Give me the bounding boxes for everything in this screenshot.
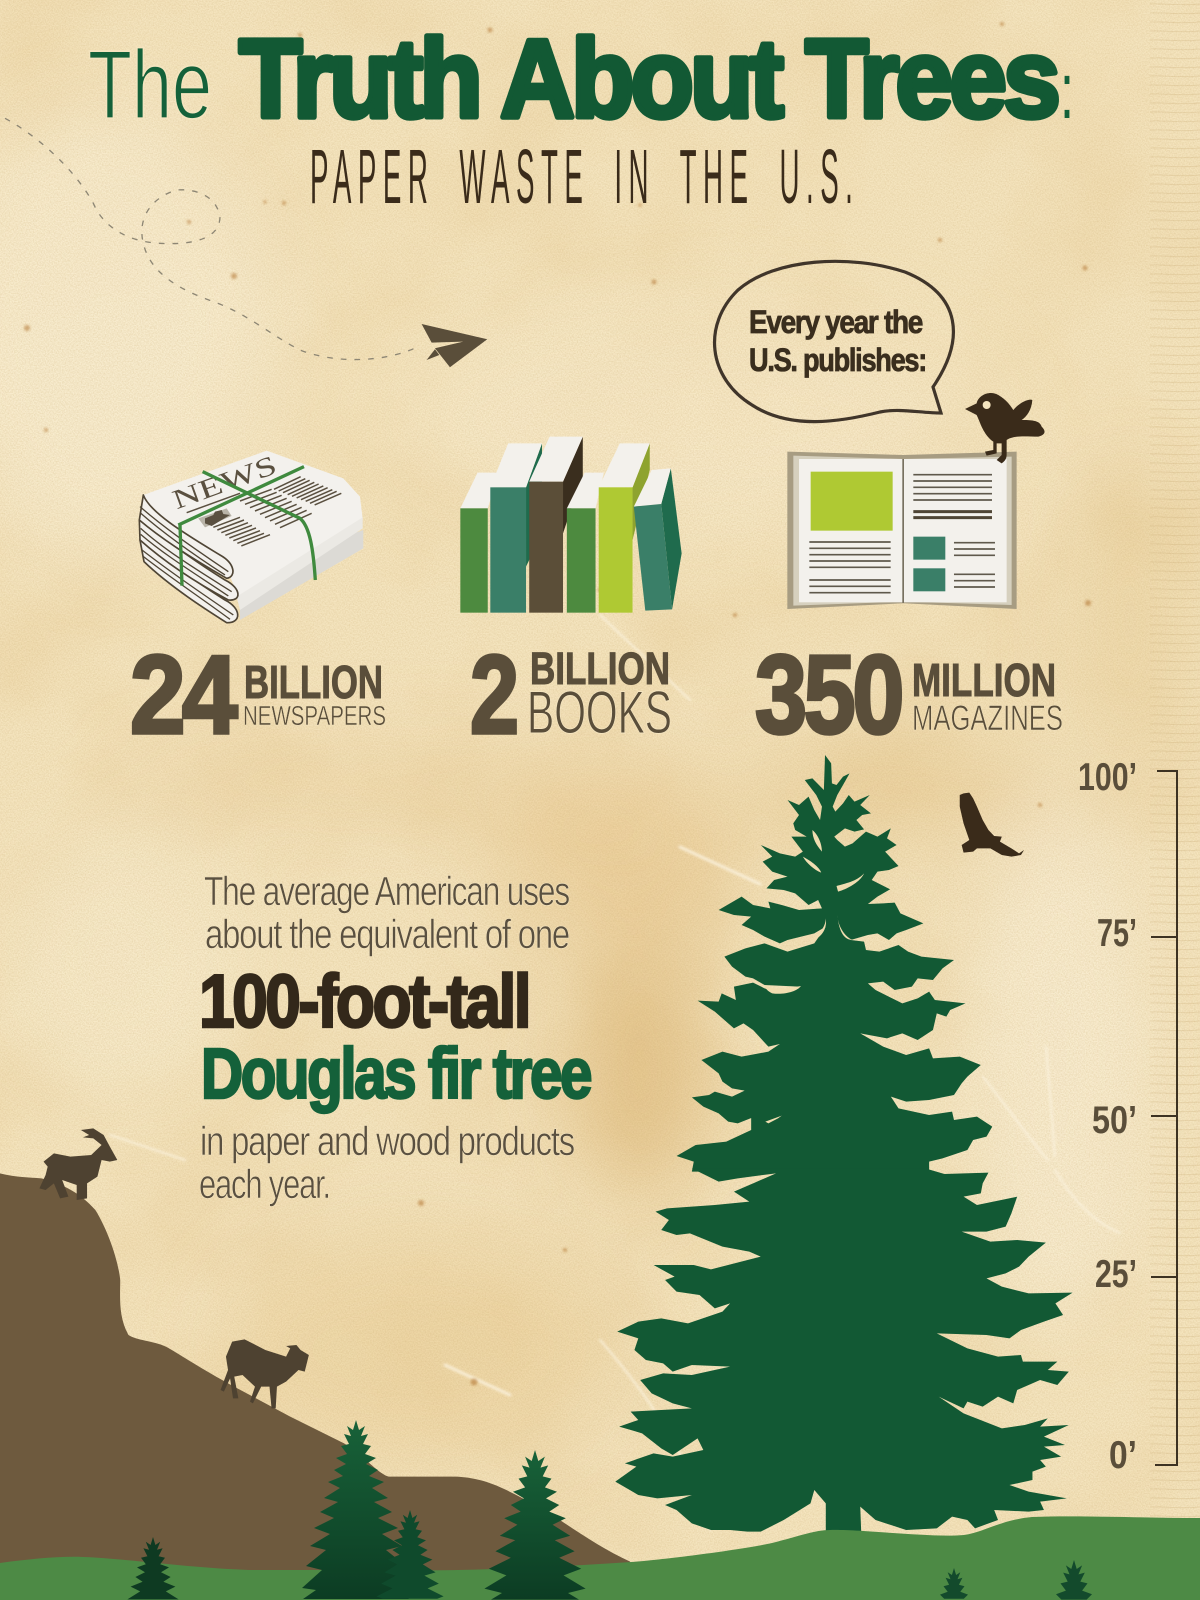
icon: newspapers: [139, 450, 363, 623]
book 3: [529, 437, 583, 613]
goat on cliff: [39, 1128, 117, 1200]
label 100 feet: 100’: [1078, 756, 1137, 799]
title word: The: The: [88, 30, 212, 139]
lime picture: [811, 472, 893, 531]
dashed flight path: [5, 118, 418, 360]
icon: magazine: [787, 452, 1017, 609]
icon: paper plane: [422, 324, 487, 367]
stat: 350 million magazines: [755, 633, 1063, 757]
intro line 2: about the equivalent of one: [205, 911, 569, 957]
subtitle: PAPER WASTE IN THE U.S.: [310, 135, 853, 220]
book 6: [634, 468, 682, 611]
title: [88, 17, 1074, 141]
stat: 2 billion books: 2: [470, 633, 519, 757]
stat: 24 billion newspapers: [130, 633, 386, 757]
label 50 feet: 50’: [1092, 1099, 1137, 1142]
scale axis: [1155, 771, 1177, 1465]
newspaper headline: NEWS: [168, 450, 281, 515]
title colon: :: [1060, 46, 1074, 135]
label 0 feet: 0’: [1109, 1434, 1137, 1477]
label 75 feet: 75’: [1097, 912, 1137, 955]
bubble text line 2: U.S. publishes:: [749, 342, 926, 378]
bubble text line 1: Every year the: [749, 304, 923, 340]
icon: small bird: [965, 393, 1045, 463]
book 2: [490, 443, 542, 613]
icon: books: [460, 437, 682, 613]
stat: 24 billion newspapers: NEWSPAPERS: [243, 700, 386, 731]
label 25 feet: 25’: [1095, 1253, 1137, 1296]
highlight: 100-foot-tall: 100-foot-tall: [199, 959, 529, 1043]
book 4: [567, 473, 604, 613]
bubble outline: [715, 261, 953, 422]
small fir tree: far right: [1056, 1560, 1092, 1600]
hillside: [0, 1173, 630, 1600]
text block: average American: [199, 868, 591, 1207]
tick marks: [1151, 937, 1176, 1277]
book 5: [599, 443, 650, 613]
outro line 2: each year.: [199, 1161, 330, 1207]
highlight: Douglas fir tree: Douglas fir tree: [201, 1035, 591, 1114]
stat: 2 billion books: BOOKS: [527, 679, 672, 746]
speech bubble: [715, 261, 953, 422]
green ground: [0, 1516, 1200, 1600]
stat: 24 billion newspapers: 24: [130, 633, 238, 757]
large Douglas fir tree: [615, 755, 1073, 1537]
icon: soaring eagle: [960, 793, 1024, 857]
stat: 24 billion newspapers: BILLION: [244, 656, 383, 708]
book 1: [460, 473, 499, 613]
intro line 1: The average American uses: [204, 868, 570, 914]
small fir tree: far left: [127, 1537, 179, 1599]
measuring scale: [1078, 756, 1177, 1477]
stat: 350 million magazines: MAGAZINES: [912, 699, 1063, 738]
small fir tree: lower right: [940, 1568, 968, 1599]
title words: Truth About Trees: Truth About Trees: [239, 17, 1057, 141]
stat: 2 billion books: [470, 633, 672, 757]
stat: 350 million magazines: 350: [755, 633, 901, 757]
goat on slope: [221, 1339, 309, 1408]
teal pictures: [913, 537, 945, 591]
small fir tree: tall centre: [302, 1420, 410, 1599]
stat: 350 million magazines: MILLION: [912, 654, 1056, 706]
stat: 2 billion books: BILLION: [530, 643, 670, 694]
small fir tree: behind centre: [376, 1510, 444, 1599]
outro line 1: in paper and wood products: [200, 1118, 575, 1164]
small fir tree: right of centre: [484, 1450, 586, 1600]
